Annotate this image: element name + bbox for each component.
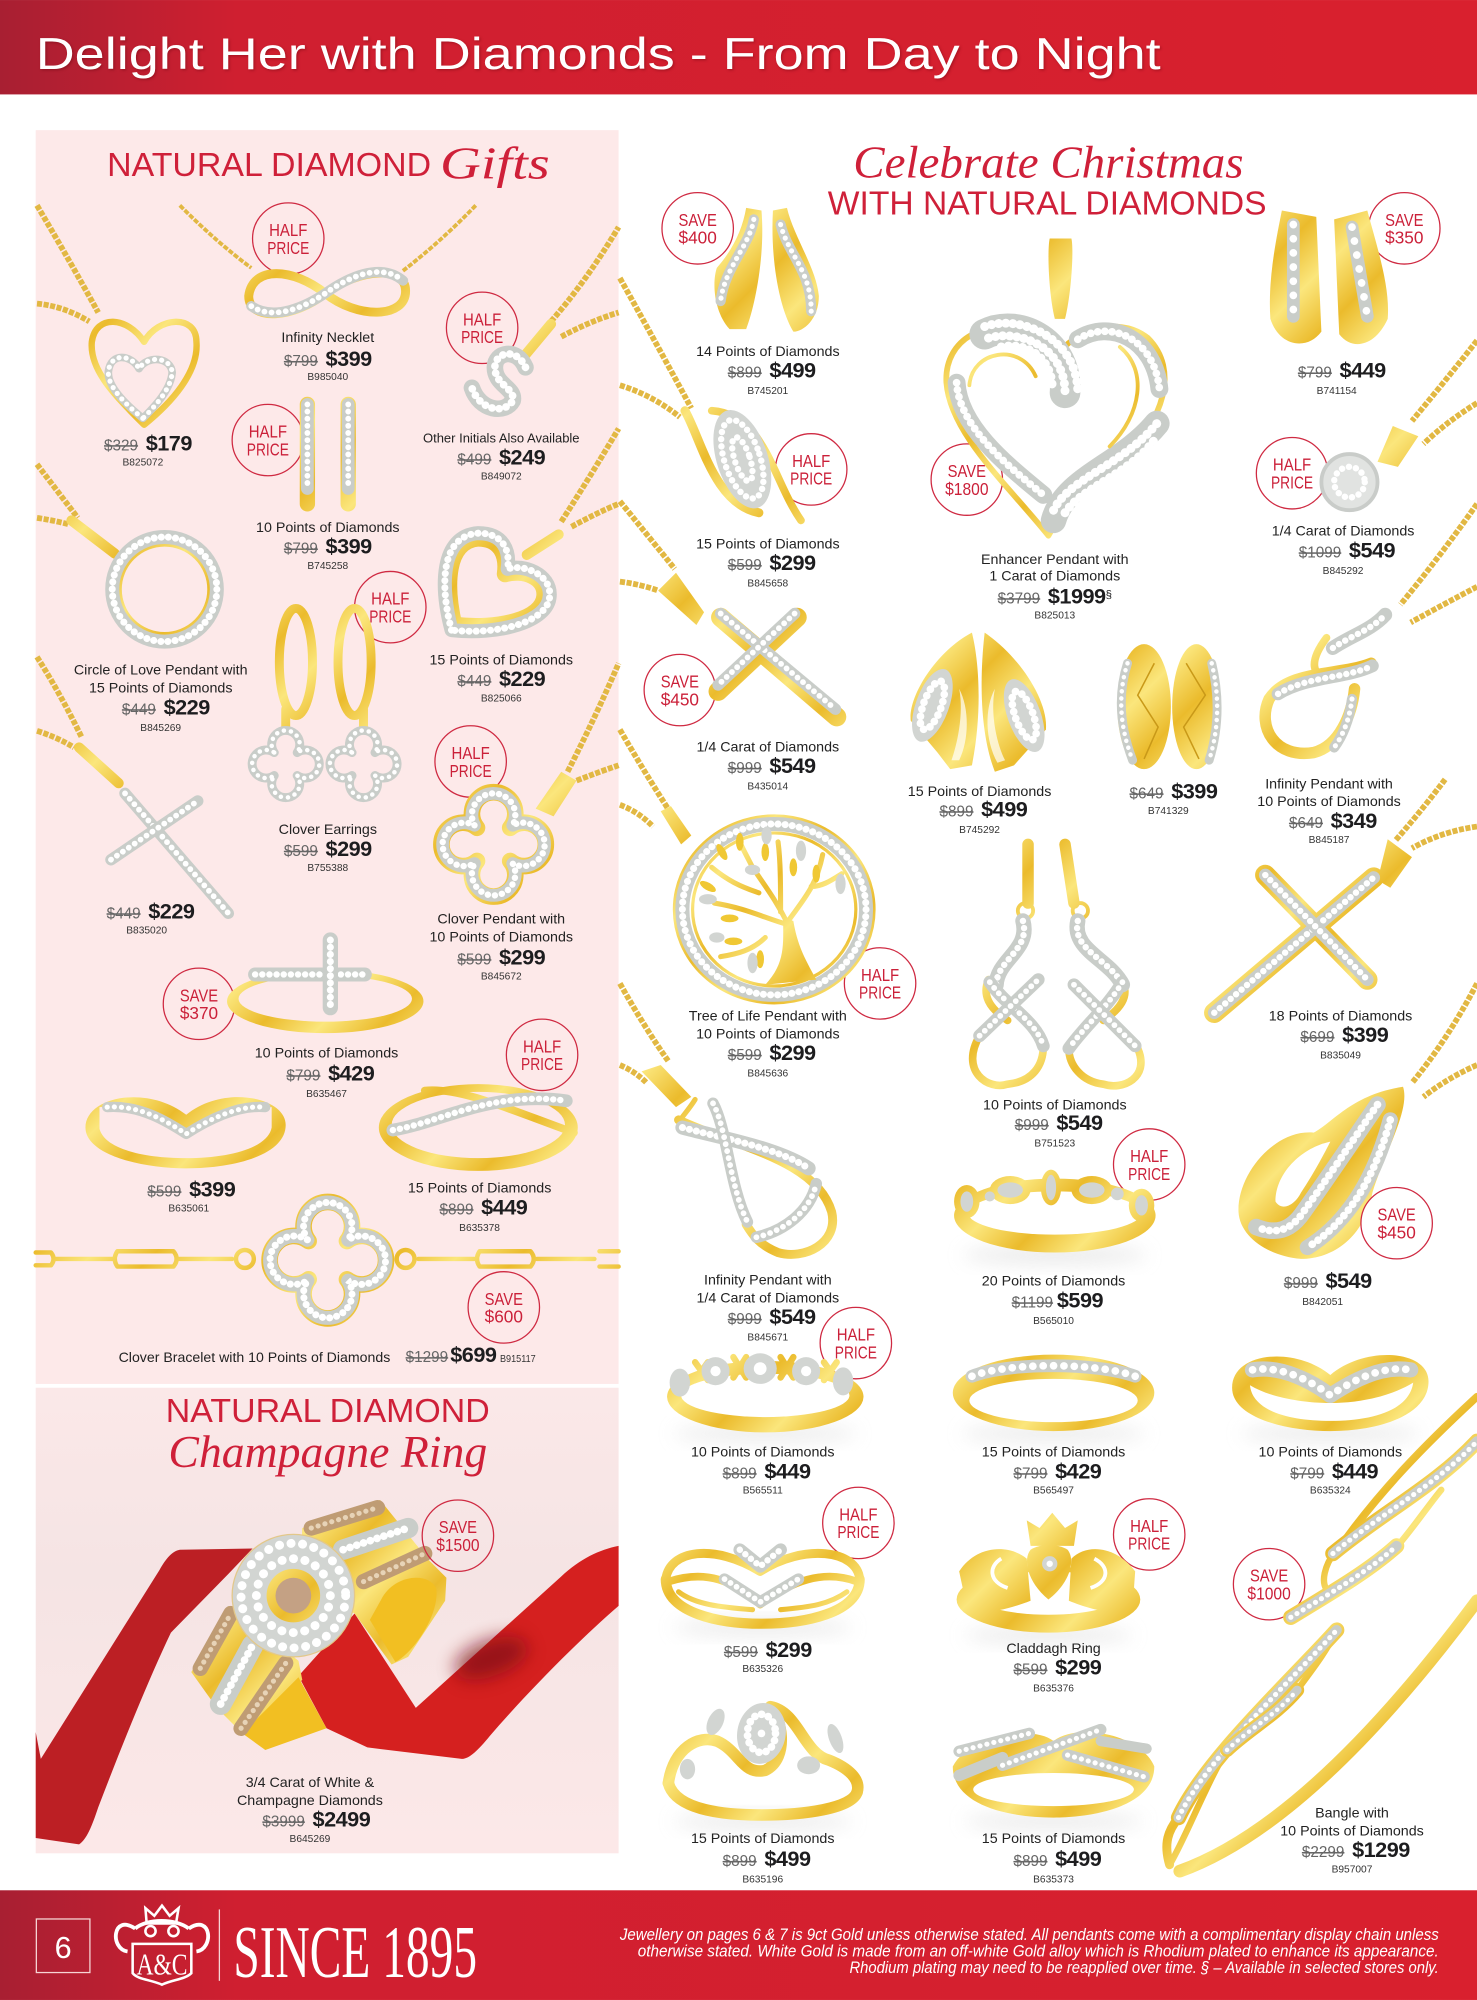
footer band bbox=[0, 1890, 1477, 2000]
label: initial pendant bbox=[423, 431, 580, 483]
jewel: woven earrings bbox=[1117, 644, 1221, 769]
badge: half price infinity: HALF bbox=[269, 220, 307, 240]
badge: half price earrings bbox=[232, 404, 304, 476]
label: circle of love pendant: Circle of Love Pendant with bbox=[74, 663, 248, 679]
label: tree of life pendant: Tree of Life Pendant with bbox=[689, 1008, 847, 1024]
label: cross ring: 10 Points of Diamonds bbox=[255, 1045, 398, 1061]
label: cross ring: $799 $429 bbox=[286, 1060, 375, 1085]
label: 20 points ring bbox=[982, 1274, 1125, 1327]
jewel: channel band ring bbox=[953, 1355, 1154, 1441]
badge: save 1500 bbox=[422, 1500, 494, 1571]
badge: save 1500: $1500 bbox=[436, 1535, 480, 1555]
label: twist bangle: Bangle with bbox=[1315, 1806, 1389, 1822]
label: tree of life pendant bbox=[689, 1008, 847, 1080]
label: infinity teardrop pendant: 1/4 Carat of Diamonds bbox=[696, 1290, 839, 1306]
label: hoop earrings: 10 Points of Diamonds bbox=[256, 520, 400, 536]
jewel: long drop earrings bbox=[973, 844, 1141, 1086]
label: cluster swirl ring bbox=[691, 1831, 834, 1886]
label: claddagh ring: Claddagh Ring bbox=[1006, 1641, 1101, 1657]
label: wishbone band ring: B635324 bbox=[1310, 1486, 1351, 1497]
badge: half price clover earrings: PRICE bbox=[369, 606, 411, 626]
jewel: infinity teardrop pendant bbox=[620, 983, 833, 1254]
badge: half price claddagh bbox=[1113, 1499, 1185, 1570]
label: twist bangle: B957007 bbox=[1332, 1864, 1373, 1875]
label: cross pendant bbox=[696, 739, 839, 793]
label: claddagh ring: $599 $299 bbox=[1013, 1655, 1102, 1680]
panel: natural diamond champagne ring bbox=[36, 1388, 619, 1853]
heading: celebrate christmas: Celebrate Christmas bbox=[853, 136, 1244, 187]
page number bbox=[36, 1919, 90, 1973]
label: infinity teardrop pendant: $999 $549 bbox=[728, 1304, 816, 1329]
label: trilogy band ring: B565511 bbox=[743, 1486, 783, 1497]
label: circle of love pendant: $449 $229 bbox=[122, 694, 210, 719]
wordmark: since 1895: SINCE 1895 bbox=[233, 1912, 477, 1994]
badge: save 400: $400 bbox=[679, 228, 717, 248]
jewel: tree of life pendant bbox=[620, 730, 874, 1003]
label: swirl teardrop pendant: $999 $549 bbox=[1284, 1268, 1372, 1293]
jewel: clover earrings bbox=[252, 608, 397, 798]
label: swirl pendant: B845658 bbox=[747, 579, 789, 590]
label: infinity pendant: 10 Points of Diamonds bbox=[1257, 794, 1401, 810]
badge: half price swirl pendant: PRICE bbox=[790, 469, 832, 489]
jewel: diamond cross pendant bbox=[37, 657, 228, 913]
label: clover earrings: B755388 bbox=[307, 863, 349, 874]
badge: half price double wishbone: HALF bbox=[839, 1504, 878, 1524]
label: champagne ring: B645269 bbox=[290, 1834, 331, 1845]
label: cluster swirl ring: $899 $499 bbox=[723, 1846, 811, 1871]
label: twist bangle: $2299 $1299 bbox=[1302, 1837, 1410, 1862]
label: solitaire pendant: $1099 $549 bbox=[1299, 537, 1396, 562]
label: 14 points earrings: 14 Points of Diamonds bbox=[696, 344, 840, 360]
jewel: 350 hoop earrings bbox=[1270, 210, 1388, 344]
jewel: clover pendant bbox=[441, 663, 619, 897]
badge: save 1800: $1800 bbox=[945, 479, 989, 499]
badge: half price clover pendant: PRICE bbox=[450, 761, 492, 781]
label: cluster swirl ring: 15 Points of Diamonds bbox=[691, 1831, 834, 1847]
badge: save 600 bbox=[468, 1272, 540, 1343]
heading: natural diamond gifts: NATURAL DIAMOND bbox=[107, 147, 431, 184]
jewel: crossover baguette ring bbox=[953, 1730, 1154, 1829]
label: wishbone ring: $599 $399 bbox=[147, 1176, 236, 1201]
jewel: 18 points cross pendant bbox=[1214, 779, 1477, 1013]
icon: A&C crest logo: A&C bbox=[136, 1947, 187, 1981]
label: tree of life pendant: $599 $299 bbox=[728, 1040, 816, 1065]
badge: save 450 swirl: SAVE bbox=[1378, 1205, 1416, 1225]
label: initial pendant: B849072 bbox=[481, 472, 522, 483]
badge: save 1000: SAVE bbox=[1250, 1566, 1288, 1586]
label: infinity pendant: Infinity Pendant with bbox=[1265, 776, 1393, 792]
label: enhancer pendant: 1 Carat of Diamonds bbox=[989, 568, 1120, 584]
label: channel band ring: 15 Points of Diamonds bbox=[982, 1445, 1125, 1461]
badge: half price double wishbone: PRICE bbox=[837, 1522, 880, 1542]
label: wishbone band ring: 10 Points of Diamonds bbox=[1259, 1445, 1402, 1461]
label: 18 points cross bbox=[1269, 1008, 1412, 1062]
ribbon bbox=[36, 1546, 619, 1844]
badge: half price band ring: PRICE bbox=[835, 1342, 877, 1362]
label: clover bracelet bbox=[119, 1342, 536, 1367]
label: open heart pendant: B825066 bbox=[481, 694, 522, 705]
label: trilogy band ring: 10 Points of Diamonds bbox=[691, 1445, 834, 1461]
label: 14 points earrings: $899 $499 bbox=[728, 358, 816, 383]
label: diamond cross: B835020 bbox=[126, 926, 167, 937]
label: infinity pendant: B845187 bbox=[1309, 835, 1350, 846]
label: drop earrings: B745292 bbox=[959, 825, 1000, 836]
label: diamond cross bbox=[107, 898, 195, 937]
label: trilogy band ring bbox=[691, 1445, 834, 1497]
label: 350 hoop earrings: $799 $449 bbox=[1298, 358, 1386, 383]
title: Delight Her with Diamonds - From Day to Night bbox=[36, 30, 1161, 79]
label: cross pendant: $999 $549 bbox=[728, 753, 816, 778]
jewel: cross ring bbox=[227, 940, 423, 1033]
jewel: open heart pendant bbox=[445, 429, 619, 631]
label: 18 points cross: B835049 bbox=[1320, 1051, 1361, 1062]
label: diamond cross: $449 $229 bbox=[107, 898, 195, 923]
label: cross pendant: 1/4 Carat of Diamonds bbox=[696, 739, 839, 755]
badge: half price ring: PRICE bbox=[521, 1054, 563, 1074]
jewel: hoop earrings 10 points bbox=[307, 404, 348, 504]
badge: half price solitaire bbox=[1256, 438, 1328, 509]
badge: half price tree of life bbox=[844, 948, 916, 1019]
label: channel band ring: B565497 bbox=[1033, 1486, 1074, 1497]
badge: half price claddagh: PRICE bbox=[1128, 1534, 1170, 1554]
badge: half price 20 points ring: PRICE bbox=[1128, 1164, 1170, 1184]
label: 18 points cross: $699 $399 bbox=[1300, 1022, 1389, 1047]
jewel: wishbone band ring bbox=[1232, 1355, 1429, 1441]
badge: save 350: $350 bbox=[1385, 228, 1423, 248]
jewel: 20 points ring bbox=[954, 1170, 1156, 1264]
badge: half price band ring: HALF bbox=[837, 1325, 875, 1345]
label: double heart pendant: B825072 bbox=[122, 458, 164, 469]
label: open heart pendant: 15 Points of Diamonds bbox=[429, 653, 573, 669]
badge: half price initial: HALF bbox=[463, 309, 501, 329]
badge: half price solitaire: PRICE bbox=[1271, 473, 1313, 493]
badge: save 370 bbox=[163, 968, 235, 1040]
label: swirl teardrop pendant bbox=[1284, 1268, 1372, 1308]
label: crossover baguette ring bbox=[982, 1831, 1125, 1886]
label: clover pendant: $599 $299 bbox=[457, 944, 546, 969]
label: swirl pendant: 15 Points of Diamonds bbox=[696, 536, 840, 552]
badge: half price initial: PRICE bbox=[461, 327, 503, 347]
badge: save 350: SAVE bbox=[1385, 210, 1423, 230]
label: long drop earrings: $999 $549 bbox=[1015, 1110, 1103, 1135]
label: hoop earrings bbox=[256, 520, 400, 572]
panel: natural diamond gifts bbox=[36, 130, 619, 1384]
badge: half price double wishbone bbox=[823, 1487, 894, 1559]
label: clover bracelet: B915117 bbox=[500, 1354, 536, 1365]
label: channel band ring: $799 $429 bbox=[1013, 1458, 1102, 1483]
label: infinity pendant bbox=[1257, 776, 1401, 846]
jewel: swirl pendant bbox=[620, 278, 801, 520]
label: trilogy band ring: $899 $449 bbox=[723, 1458, 811, 1483]
label: infinity necklet: B985040 bbox=[307, 372, 349, 383]
label: drop earrings bbox=[908, 784, 1051, 836]
badge: half price tree of life: PRICE bbox=[859, 983, 901, 1003]
label: crossover baguette ring: 15 Points of Diamonds bbox=[982, 1831, 1125, 1847]
label: cross ring: B635467 bbox=[306, 1089, 347, 1100]
badge: half price swirl pendant bbox=[775, 434, 847, 505]
label: cross pendant: B435014 bbox=[747, 782, 789, 793]
header banner bbox=[0, 0, 1477, 94]
label: enhancer pendant: B825013 bbox=[1034, 611, 1076, 622]
label: 20 points ring: $1199$599 bbox=[1012, 1287, 1104, 1312]
label: double wishbone ring bbox=[724, 1637, 812, 1675]
label: long drop earrings: 10 Points of Diamonds bbox=[983, 1098, 1127, 1114]
label: champagne ring bbox=[237, 1775, 383, 1845]
label: crossover baguette ring: $899 $499 bbox=[1013, 1846, 1102, 1871]
label: crossover ring: 15 Points of Diamonds bbox=[408, 1181, 551, 1197]
label: drop earrings: $899 $499 bbox=[939, 796, 1028, 821]
label: tree of life pendant: 10 Points of Diamonds bbox=[696, 1026, 840, 1042]
badge: save 1000 bbox=[1233, 1548, 1305, 1620]
jewel: 14 points earrings bbox=[714, 208, 819, 332]
label: infinity teardrop pendant: B845671 bbox=[747, 1333, 789, 1344]
label: wishbone band ring: $799 $449 bbox=[1290, 1458, 1379, 1483]
label: swirl teardrop pendant: B842051 bbox=[1302, 1297, 1343, 1308]
label: woven earrings: $649 $399 bbox=[1130, 778, 1218, 803]
label: solitaire pendant: 1/4 Carat of Diamonds bbox=[1272, 524, 1414, 540]
label: champagne ring: 3/4 Carat of White & bbox=[246, 1775, 375, 1791]
badge: half price clover earrings: HALF bbox=[371, 589, 410, 609]
label: 350 hoop earrings bbox=[1298, 358, 1386, 397]
jewel: clover bracelet bbox=[36, 1202, 619, 1318]
jewel: wishbone ring bbox=[85, 1097, 286, 1168]
label: long drop earrings bbox=[983, 1098, 1127, 1150]
label: hoop earrings: B745258 bbox=[307, 561, 349, 572]
badge: save 400 bbox=[662, 193, 733, 264]
divider bbox=[219, 1909, 220, 1981]
label: open heart pendant bbox=[429, 653, 573, 705]
badge: save 450 swirl bbox=[1361, 1187, 1432, 1259]
badge: save 450 cross: $450 bbox=[661, 689, 699, 709]
label: crossover ring: B635378 bbox=[459, 1223, 500, 1234]
label: 14 points earrings: B745201 bbox=[747, 386, 789, 397]
label: clover earrings bbox=[279, 822, 377, 874]
jewel: initial S pendant bbox=[472, 227, 619, 409]
badge: save 370: SAVE bbox=[180, 985, 218, 1005]
jewel: 15 points drop earrings bbox=[904, 633, 1053, 772]
label: clover bracelet: $699 bbox=[450, 1342, 497, 1367]
label: circle of love pendant: 15 Points of Diamonds bbox=[89, 681, 232, 697]
jewel: 1/4 carat cross pendant bbox=[620, 501, 837, 717]
badge: half price tree of life: HALF bbox=[861, 965, 899, 985]
badge: save 1500: SAVE bbox=[439, 1517, 477, 1537]
label: 350 hoop earrings: B741154 bbox=[1317, 386, 1357, 397]
badge: save 1000: $1000 bbox=[1247, 1583, 1291, 1603]
label: double wishbone ring: $599 $299 bbox=[724, 1637, 812, 1662]
label: initial pendant: $499 $249 bbox=[457, 444, 546, 469]
jewel: swirl teardrop pendant bbox=[1238, 983, 1477, 1259]
label: infinity teardrop pendant: Infinity Pendant with bbox=[704, 1272, 832, 1288]
page number: 6 bbox=[55, 1931, 72, 1965]
label: woven earrings bbox=[1130, 778, 1218, 817]
label: hoop earrings: $799 $399 bbox=[284, 534, 372, 559]
label: 20 points ring: 20 Points of Diamonds bbox=[982, 1274, 1125, 1290]
badge: save 450 cross bbox=[644, 654, 716, 726]
badge: half price claddagh: HALF bbox=[1130, 1516, 1168, 1536]
label: wishbone band ring bbox=[1259, 1445, 1402, 1497]
label: clover pendant: 10 Points of Diamonds bbox=[429, 929, 573, 945]
jewel: circle of love pendant bbox=[37, 464, 217, 642]
label: 14 points earrings bbox=[696, 344, 840, 397]
label: enhancer pendant: Enhancer Pendant with bbox=[981, 552, 1129, 568]
jewel: infinity necklet bbox=[180, 205, 476, 314]
badge: half price clover earrings bbox=[355, 571, 426, 643]
heading: natural diamond champagne ring bbox=[166, 1393, 490, 1477]
jewel: infinity pendant bbox=[1265, 504, 1477, 753]
badge: save 350 bbox=[1369, 193, 1440, 264]
panel background bbox=[36, 130, 619, 1384]
badge: half price earrings: PRICE bbox=[247, 439, 289, 459]
label: enhancer pendant: § bbox=[1106, 589, 1112, 601]
badge: half price earrings: HALF bbox=[249, 422, 287, 442]
label: infinity pendant: $649 $349 bbox=[1289, 808, 1377, 833]
label: wishbone ring bbox=[147, 1176, 236, 1215]
label: infinity necklet: Infinity Necklet bbox=[281, 330, 374, 346]
badge: save 600: SAVE bbox=[485, 1289, 523, 1309]
badge: half price clover pendant bbox=[435, 726, 506, 797]
label: clover pendant bbox=[429, 911, 573, 983]
label: infinity necklet: $799 $399 bbox=[284, 346, 372, 371]
badge: half price infinity bbox=[253, 203, 324, 274]
label: claddagh ring bbox=[1006, 1641, 1102, 1694]
label: drop earrings: 15 Points of Diamonds bbox=[908, 784, 1051, 800]
label: champagne ring: $3999 $2499 bbox=[262, 1807, 371, 1832]
jewel: crossover ring bbox=[379, 1084, 578, 1171]
jewel: cluster swirl ring bbox=[668, 1699, 858, 1829]
badge: half price 20 points ring bbox=[1113, 1129, 1185, 1200]
badge: half price band ring bbox=[820, 1307, 892, 1379]
label: double wishbone ring: B635326 bbox=[742, 1664, 783, 1675]
label: wishbone ring: B635061 bbox=[168, 1204, 209, 1215]
jewel: double heart pendant bbox=[37, 205, 197, 425]
label: woven earrings: B741329 bbox=[1148, 806, 1189, 817]
label: crossover baguette ring: B635373 bbox=[1033, 1875, 1074, 1886]
badge: half price clover pendant: HALF bbox=[452, 743, 490, 763]
heading: celebrate christmas bbox=[828, 136, 1267, 222]
label: solitaire pendant: B845292 bbox=[1323, 566, 1364, 577]
label: enhancer pendant bbox=[981, 552, 1129, 622]
label: 18 points cross: 18 Points of Diamonds bbox=[1269, 1008, 1412, 1024]
jewel: enhancer heart pendant bbox=[946, 239, 1165, 536]
jewel: solitaire pendant bbox=[1321, 341, 1477, 510]
label: circle of love pendant: B845269 bbox=[140, 723, 181, 734]
label: claddagh ring: B635376 bbox=[1033, 1683, 1074, 1694]
badge: half price 20 points ring: HALF bbox=[1130, 1146, 1168, 1166]
label: clover bracelet: $1299 bbox=[406, 1349, 448, 1366]
badge: save 450 swirl: $450 bbox=[1378, 1223, 1416, 1243]
label: champagne ring: Champagne Diamonds bbox=[237, 1793, 383, 1809]
jewel: twist bangle bbox=[1167, 1397, 1477, 1871]
footnote bbox=[619, 1925, 1439, 1977]
badge: half price infinity: PRICE bbox=[267, 238, 309, 258]
badge: save 370: $370 bbox=[180, 1003, 218, 1023]
heading: natural diamond champagne ring: NATURAL DIAMOND bbox=[166, 1393, 490, 1430]
label: clover earrings: $599 $299 bbox=[284, 836, 372, 861]
panel background bbox=[36, 1388, 619, 1853]
label: crossover ring bbox=[408, 1181, 551, 1234]
label: clover bracelet: Clover Bracelet with 10 Points of Diamonds bbox=[119, 1350, 390, 1366]
badge: save 1800: SAVE bbox=[948, 461, 986, 481]
badge: half price swirl pendant: HALF bbox=[792, 451, 830, 471]
jewel: claddagh ring bbox=[957, 1513, 1140, 1643]
label: solitaire pendant bbox=[1272, 524, 1414, 577]
badge: half price ring bbox=[506, 1019, 578, 1091]
badge: save 450 cross: SAVE bbox=[661, 672, 699, 692]
label: double heart pendant: $329 $179 bbox=[104, 430, 192, 455]
badge: save 1800 bbox=[931, 444, 1003, 515]
badge: half price solitaire: HALF bbox=[1273, 455, 1311, 475]
label: long drop earrings: B751523 bbox=[1034, 1139, 1076, 1150]
label: double heart pendant bbox=[104, 430, 192, 469]
jewel: champagne diamond ring bbox=[191, 1500, 446, 1750]
badge: save 400: SAVE bbox=[679, 210, 717, 230]
badge: save 600: $600 bbox=[485, 1307, 523, 1327]
label: clover earrings: Clover Earrings bbox=[279, 822, 377, 838]
label: open heart pendant: $449 $229 bbox=[457, 666, 546, 691]
label: swirl pendant: $599 $299 bbox=[728, 550, 816, 575]
label: 20 points ring: B565010 bbox=[1033, 1316, 1074, 1327]
label: tree of life pendant: B845636 bbox=[747, 1069, 789, 1080]
label: twist bangle bbox=[1280, 1806, 1424, 1875]
label: clover pendant: Clover Pendant with bbox=[437, 911, 565, 927]
label: channel band ring bbox=[982, 1445, 1125, 1497]
label: swirl pendant bbox=[696, 536, 840, 590]
icon: A&C crest logo bbox=[116, 1906, 208, 1985]
heading: natural diamond gifts: Gifts bbox=[440, 138, 550, 189]
label: infinity necklet bbox=[281, 330, 374, 383]
badge: half price initial bbox=[446, 292, 518, 364]
heading: natural diamond champagne ring: Champagne Ring bbox=[168, 1426, 487, 1477]
label: infinity teardrop pendant bbox=[696, 1272, 839, 1344]
heading: natural diamond gifts bbox=[107, 138, 550, 189]
panel: celebrate christmas bbox=[620, 136, 1477, 1886]
label: cluster swirl ring: B635196 bbox=[742, 1875, 783, 1886]
heading: celebrate christmas: WITH NATURAL DIAMONDS bbox=[828, 185, 1267, 222]
label: cross ring bbox=[255, 1045, 398, 1100]
label: initial pendant: Other Initials Also Available bbox=[423, 431, 580, 446]
label: crossover ring: $899 $449 bbox=[439, 1194, 528, 1219]
label: clover pendant: B845672 bbox=[481, 972, 522, 983]
badge: half price ring: HALF bbox=[523, 1036, 561, 1056]
jewel: double wishbone ring bbox=[666, 1550, 860, 1635]
label: twist bangle: 10 Points of Diamonds bbox=[1280, 1823, 1424, 1839]
jewel: trilogy band ring bbox=[667, 1353, 863, 1441]
label: enhancer pendant: $3799 $1999 bbox=[998, 583, 1106, 608]
label: circle of love pendant bbox=[74, 663, 248, 734]
